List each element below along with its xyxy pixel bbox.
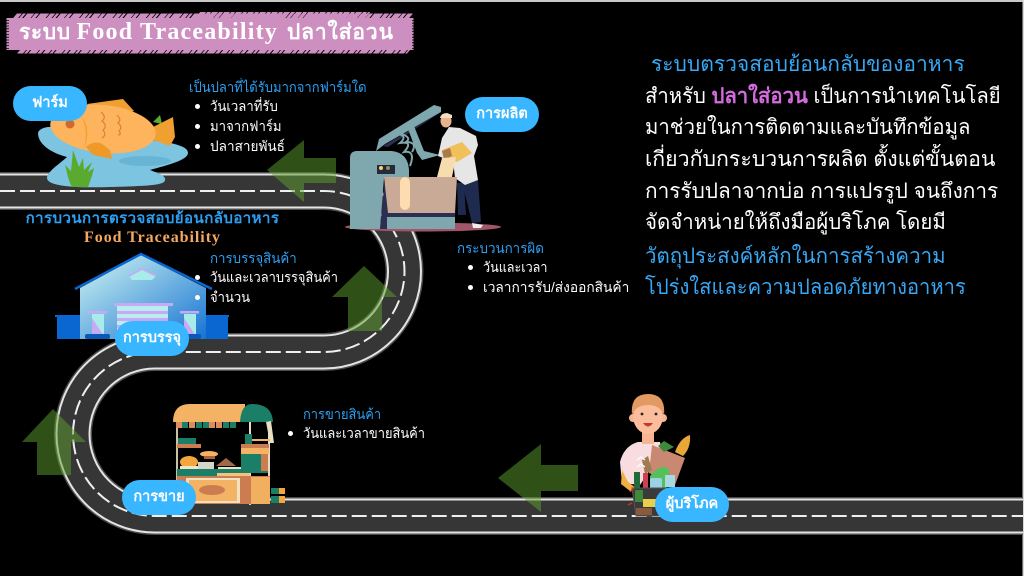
text block: description: จัดจำหน่ายให้ถึงมือผู้บริโภค โดยมี [645, 211, 946, 234]
text block: farm details: วันเวลาที่รับ [210, 98, 278, 114]
heading: traceability process: การบวนการตรวจสอบย้อนกลับอาหาร [26, 211, 279, 227]
text block: sale details: การขายสินค้า [303, 406, 381, 422]
text block: description: มาช่วยในการติดตามและบันทึกข้อมูล [645, 116, 970, 139]
text block: production details: วันและเวลา [483, 259, 547, 275]
text block: production details: กระบวนการผิด [457, 240, 544, 256]
arrow: up to production [332, 266, 397, 331]
label: packing: การบรรจุ [123, 330, 181, 346]
label: production: การผลิต [476, 106, 528, 122]
text block: packing details: วันและเวลาบรรจุสินค้า [210, 269, 338, 285]
text block: description: การรับปลาจากบ่อ การแปรรูป จนถึงการ [645, 180, 998, 203]
label: farm [13, 86, 87, 121]
text block: farm details: ปลาสายพันธ์ [210, 138, 285, 154]
text block: description: เกี่ยวกับกระบวนการผลิต ตั้งแต่ขั้นตอน [645, 148, 995, 171]
label: consumer [655, 487, 729, 522]
icon: warehouse [55, 254, 229, 339]
text block: production details [457, 240, 629, 295]
text block: packing details: จำนวน [210, 289, 250, 305]
arrow: consumer to sale [498, 444, 578, 512]
text block: description [645, 53, 1001, 299]
label: sale [122, 480, 196, 515]
heading: traceability process [26, 210, 279, 246]
text block: description: สำหรับ ปลาใส่อวน เป็นการนำเทคโนโลยี [645, 85, 1001, 108]
text block: packing details: การบรรจุสินค้า [210, 250, 297, 266]
label: production [465, 97, 539, 132]
label: packing [115, 321, 189, 356]
text block: farm details [189, 78, 367, 154]
text block: farm details: มาจากฟาร์ม [210, 118, 282, 134]
icon: mixer and baker [345, 105, 501, 232]
arrow: farm direction [267, 140, 336, 202]
text block: description: ระบบตรวจสอบย้อนกลับของอาหาร [651, 53, 965, 76]
road [0, 191, 1023, 516]
text block: description: วัตถุประสงค์หลักในการสร้างความ [645, 245, 946, 268]
title brush background [9, 16, 412, 50]
arrow: up to packing [22, 409, 86, 475]
text block: sale details: วันและเวลาขายสินค้า [303, 425, 425, 441]
icon: food stall [173, 404, 285, 505]
text block: production details: เวลาการรับ/ส่งออกสินค้า [483, 279, 629, 295]
title: ระบบ Food Traceability ปลาใส่อวน [19, 19, 394, 45]
label: farm: ฟาร์ม [32, 95, 68, 111]
text block: description: โปร่งใสและความปลอดภัยทางอาหาร [645, 276, 966, 299]
icon: consumer [620, 394, 690, 516]
text block: farm details: เป็นปลาที่ได้รับมากจากฟาร์มใด [189, 79, 367, 95]
icon: fish farm [38, 99, 188, 187]
label: consumer: ผู้บริโภค [666, 496, 718, 512]
text block: sale details [288, 406, 425, 441]
heading: traceability process: Food Traceability [84, 229, 221, 246]
label: sale: การขาย [133, 489, 185, 505]
text block: packing details [195, 250, 338, 305]
